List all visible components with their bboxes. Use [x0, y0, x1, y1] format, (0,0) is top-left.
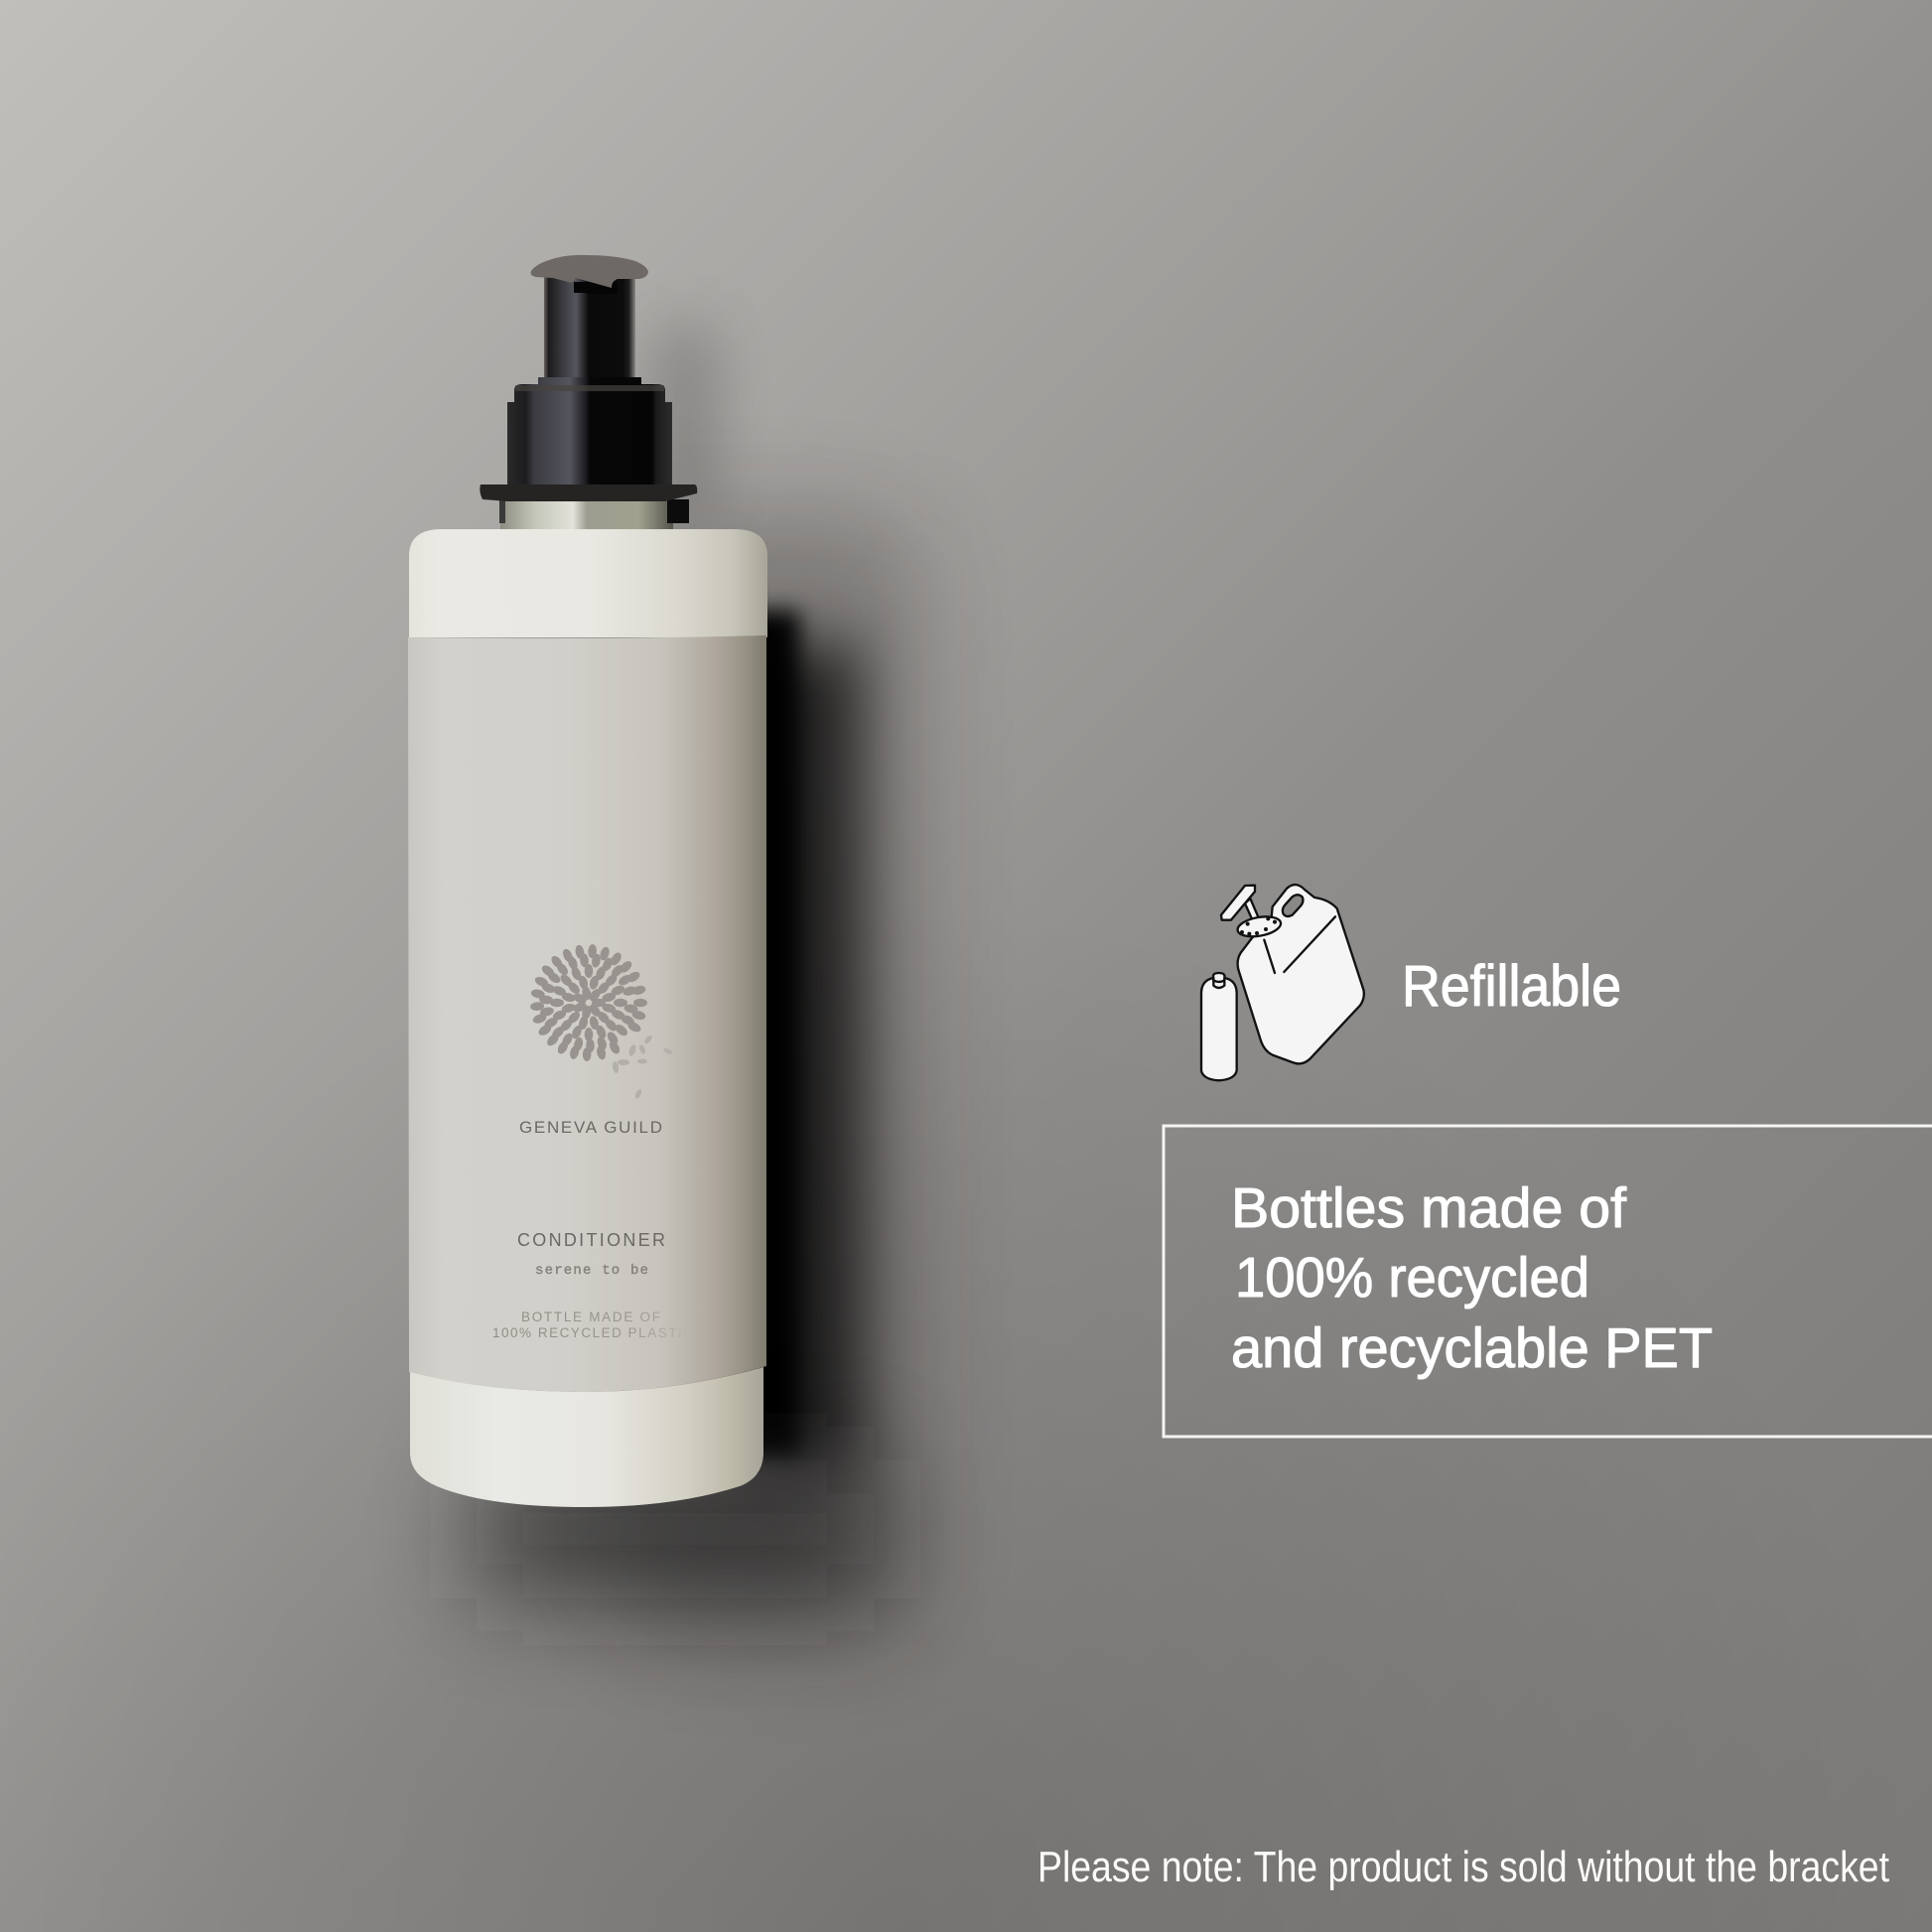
- callout line 3: and recyclable PET: [1231, 1316, 1713, 1380]
- bottle body: base: [410, 1367, 763, 1507]
- bottle body: label sleeve: [408, 635, 766, 1392]
- bottle shadow: [477, 328, 913, 1638]
- icon: refill canister and bottle: [1201, 885, 1364, 1080]
- pump neck: [499, 496, 689, 532]
- callout text: [1231, 1176, 1713, 1380]
- icon: small bottle: [1201, 973, 1237, 1080]
- brand name: GENEVA GUILD: [519, 1118, 662, 1137]
- pump nozzle slot: [574, 282, 618, 294]
- product name: CONDITIONER: [517, 1230, 665, 1250]
- pump flange: [480, 484, 697, 501]
- pump collar top ring: [515, 385, 664, 391]
- pump collar: [507, 377, 672, 488]
- pump stem: [544, 274, 635, 381]
- logo: falling leaves: [612, 1035, 673, 1100]
- bottle: [408, 255, 767, 1507]
- recycled note line 1: BOTTLE MADE OF: [521, 1310, 660, 1324]
- recycled note line 2: 100% RECYCLED PLASTIC: [492, 1325, 693, 1340]
- callout line 2: 100% recycled: [1235, 1246, 1589, 1310]
- pump cap: [531, 255, 648, 288]
- bottle body: shoulder: [409, 529, 767, 637]
- icon: canister: [1238, 885, 1364, 1063]
- tagline: serene to be: [535, 1263, 648, 1279]
- callout box: [1164, 1126, 1932, 1437]
- icon: pump tube: [1221, 886, 1283, 939]
- logo: leaf flower: [530, 944, 647, 1061]
- callout line 1: Bottles made of: [1231, 1176, 1626, 1240]
- label: refillable: Refillable: [1402, 954, 1621, 1019]
